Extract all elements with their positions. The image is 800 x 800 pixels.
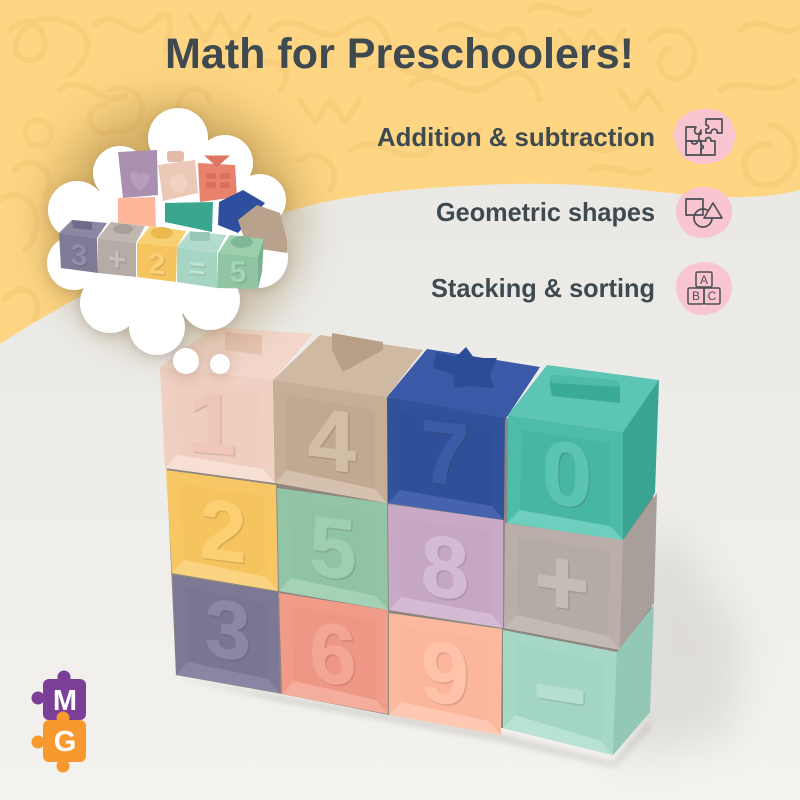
title: Math for Preschoolers! [165,30,634,78]
block 9 [389,613,502,735]
logo: M G puzzle: G [54,726,76,758]
feature: addition and subtraction: Addition & subtraction [377,122,655,152]
block 0: 0 [542,421,592,528]
icon: ABC blocks: A [700,273,708,287]
feature: stacking and sorting [431,262,732,315]
background [0,0,800,344]
mini block: 5 [217,235,264,289]
icon: puzzle [674,109,735,164]
icon: ABC blocks [676,262,732,315]
mini block: blue [218,190,265,233]
block 4: 4 [308,390,356,492]
mini block: plus [98,222,145,278]
block 8 [388,504,503,628]
mini block: 3: 3 [71,238,87,273]
mini block: 5: 5 [230,256,246,289]
block 5 [277,488,388,610]
block minus [503,605,654,755]
block 6: 6 [310,604,356,704]
block 5: 5 [310,498,356,598]
shadow on floor [625,520,745,760]
mini block: peach [118,197,156,227]
mini block: 3 [59,220,107,273]
block 1: 1 [188,374,236,474]
logo: M G puzzle [32,670,86,772]
block 3: 3 [205,581,251,679]
block 8: 8 [421,517,469,619]
icon: ABC blocks: C [708,289,717,303]
mini block: tan [238,205,287,253]
feature: geometric shapes [436,187,732,238]
mini block: 2: 2 [149,247,165,282]
mini block: equals: = [188,251,206,286]
logo: M G puzzle: M [53,685,77,717]
block plus: + [535,527,589,638]
block 4 [273,333,423,503]
product: twelve number blocks [160,327,659,768]
feature: geometric shapes: Geometric shapes [436,197,655,227]
block plus [504,493,657,650]
mini block: coral dots [198,157,237,202]
mini block: apple [158,151,198,201]
block 2: 2 [200,481,246,581]
block 7: 7 [421,401,469,506]
mini block: plus: + [108,240,126,278]
block 6 [279,593,388,714]
icon: ABC blocks: B [692,289,700,303]
mini block: teal [165,202,213,232]
thought cloud [45,100,305,374]
block 2 [166,470,278,591]
icon: shapes [676,187,732,238]
block 7 [387,347,540,520]
feature: stacking and sorting: Stacking & sorting [431,273,655,303]
feature: addition and subtraction [377,109,735,164]
mini block: heart [118,150,158,198]
block 3 [173,575,280,693]
block 1 [160,327,313,483]
block 9: 9 [421,623,469,725]
block 0 [507,365,659,540]
mini block: 2 [137,226,186,282]
block minus: − [535,642,585,744]
mini block: equals [177,231,226,288]
